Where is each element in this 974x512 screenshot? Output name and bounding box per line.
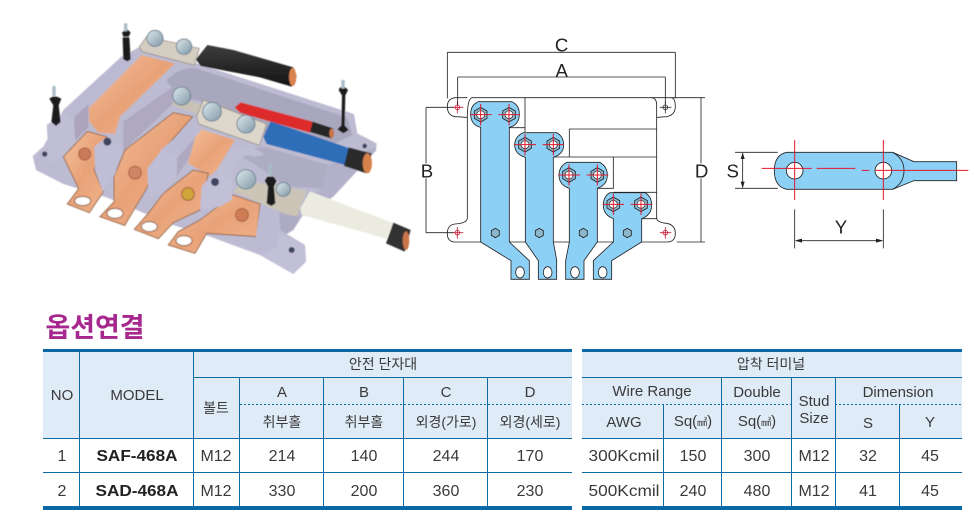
row 2: 45 [921,483,939,500]
row 2: 360 [433,483,459,500]
lug 4 [593,193,652,279]
blue cable [263,121,372,173]
front tray interior [233,147,328,188]
label B: B [421,160,433,181]
row 1: 1 [58,448,67,465]
lug 3 [559,162,607,279]
row 2 [588,483,939,500]
row 1: 150 [680,448,706,465]
row 2 [58,483,543,500]
header background [43,351,572,438]
header background [582,351,962,438]
studs [49,29,349,206]
header text: 볼트 [203,400,229,416]
header text: NO [51,387,73,404]
row 1: SAF-468A [96,448,178,465]
copper lug 4 [168,195,260,253]
row 2: 200 [351,483,377,500]
holes [786,162,892,179]
row 2: 480 [744,483,770,500]
header text: Stud [799,393,829,410]
row 2: 330 [269,483,295,500]
partition 3 strip and wall [177,132,197,177]
row 2: M12 [798,483,830,500]
bolts [474,107,647,212]
header text [606,356,935,432]
lug holes [75,196,192,246]
copper lug 3 [134,170,208,239]
label D: D [695,160,708,181]
red centre lines [762,140,968,200]
row 2: SAD-468A [96,483,179,500]
lug 1 [471,102,529,279]
diagram: terminal block top view with dimensions [421,34,708,279]
label S: S [726,160,739,181]
slots [516,267,607,278]
title: 옵션연결 [46,313,144,343]
row 1 [58,448,543,465]
copper lug 1 [63,131,107,213]
partition 4 block [200,175,233,210]
row 1: 244 [433,448,459,465]
small nuts [491,228,631,238]
header text: 외경(세로) [500,414,560,430]
silver plate 2 [172,97,207,115]
header text: Double [733,384,781,401]
row 1 [588,448,939,465]
header text: A [277,384,287,401]
row 1: M12 [200,448,232,465]
right end side [293,147,376,217]
row 2: 240 [680,483,706,500]
header text: 취부홀 [345,414,383,430]
header text: 취부홀 [263,414,301,430]
table lines [43,351,572,507]
base outline [447,98,675,242]
header text: Sq(㎟) [674,413,712,430]
row 1: 140 [351,448,377,465]
partition 2 wall [123,87,173,151]
label C: C [555,34,568,55]
ear holes [452,102,671,239]
header text: D [525,384,536,401]
row 1: 214 [269,448,295,465]
dimension lines [426,52,705,242]
header text: Dimension [863,384,933,401]
row 2: 500Kcmil [588,483,660,500]
row 1: 300Kcmil [588,448,660,465]
red centre marks [470,104,652,215]
header text: MODEL [110,387,164,404]
rounded ring around front tray [217,147,265,188]
header text: Y [925,414,935,431]
header text: AWG [606,414,642,431]
row 1: 170 [517,448,543,465]
header text: Sq(㎟) [738,413,776,430]
header text: C [441,384,452,401]
diagram: compression terminal [726,140,968,248]
row 1: 32 [859,448,877,465]
header text: S [863,415,873,432]
row 1: 45 [921,448,939,465]
partition 1 block [47,114,75,163]
dimension S and Y lines [735,152,883,248]
header text: Wire Range [612,383,692,400]
row 2: 230 [517,483,543,500]
header text: 안전 단자대 [349,356,417,372]
row 1: 300 [744,448,770,465]
right foot [260,233,306,274]
red cable [235,102,334,139]
header text: 압착 터미널 [737,356,805,372]
partition 2 block [94,137,123,192]
header text: Size [799,410,829,427]
row 2: 2 [58,483,67,500]
photo: safety terminal block with cables [33,23,411,274]
table: safety terminal block [43,349,572,510]
copper bar: left rear [89,55,175,134]
header text: 외경(가로) [416,414,476,430]
partition 3 block [147,150,177,196]
partition 1 strip [63,53,140,117]
black cable [196,45,297,87]
front pillar [256,204,286,255]
partition 2 strip [110,82,172,133]
rear tray interior [167,68,353,144]
copper lug 2 [100,113,193,225]
partition 1 wall [74,104,88,141]
base plate [33,47,377,274]
terminal body [774,152,957,189]
lug 2 [515,133,564,279]
step outlines [509,98,657,219]
row 1: M12 [798,448,830,465]
label Y: Y [835,216,848,237]
white cable [300,191,411,252]
table: compression terminal [582,349,962,510]
silver plate 1 [139,37,199,65]
copper bar: front rear [188,128,235,176]
silver nuts [147,30,290,196]
row 2: M12 [200,483,232,500]
lug screws [79,148,248,221]
label A: A [555,60,568,81]
silver plate 3 [233,180,307,217]
row 2: 41 [859,483,877,500]
table lines [582,377,962,507]
header text [51,356,560,430]
screw holes in base [42,138,367,253]
header text: B [359,384,369,401]
